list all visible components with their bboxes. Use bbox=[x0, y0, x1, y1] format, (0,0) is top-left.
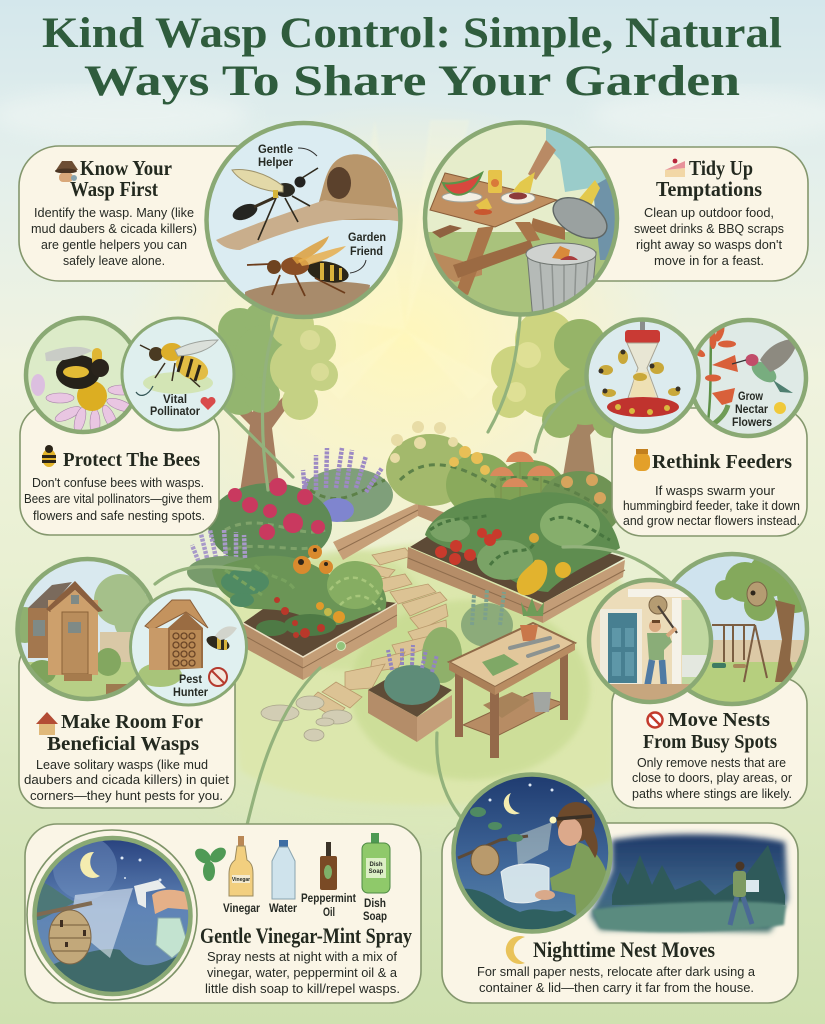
back flowering plants bbox=[298, 421, 622, 539]
body text: are gentle helpers you can bbox=[41, 237, 187, 252]
circle: headlamp person with nest bbox=[452, 773, 612, 935]
heading: Nighttime Nest Moves bbox=[533, 937, 715, 962]
title bbox=[42, 10, 782, 105]
circle: door and person removing nest bbox=[588, 579, 718, 705]
body text: container & lid—then carry it far from the house. bbox=[479, 980, 754, 995]
circle: garden shed bbox=[15, 556, 154, 702]
circle: bee hotel and pest hunter: Pest bbox=[179, 672, 202, 686]
circle: vital pollinator bee bbox=[120, 318, 235, 433]
panel: gentle vinegar-mint spray bbox=[25, 824, 421, 1003]
icon: detective hat bbox=[55, 161, 78, 182]
circle: gentle helper and garden friend wasps: Helper bbox=[258, 155, 293, 169]
cicada killer wasp bbox=[247, 236, 351, 296]
picnic table bbox=[430, 173, 565, 295]
left raised bed bbox=[212, 545, 397, 680]
bee bbox=[140, 340, 218, 387]
heading: Gentle Vinegar-Mint Spray bbox=[200, 923, 412, 948]
mud nest mound bbox=[318, 154, 400, 220]
trash can bbox=[526, 197, 608, 312]
ingredient: dish soap: Dish bbox=[364, 896, 386, 910]
heading: Temptations bbox=[656, 177, 762, 201]
icon: honey jar bbox=[634, 449, 650, 471]
body text: corners—they hunt pests for you. bbox=[30, 788, 223, 803]
person with gloves bbox=[512, 128, 615, 260]
body text: close to doors, play areas, or bbox=[632, 770, 793, 785]
panel: move nests from busy spots bbox=[612, 678, 807, 808]
garden illustration bbox=[187, 421, 625, 805]
body text bbox=[31, 205, 197, 268]
ingredient: dish soap: Soap bbox=[363, 909, 387, 923]
icon: no pests sign bbox=[209, 668, 227, 686]
title: Kind Wasp Control: Simple, Natural bbox=[42, 10, 782, 57]
ingredient: water bottle: Water bbox=[269, 901, 297, 915]
body text: Clean up outdoor food, bbox=[644, 205, 774, 220]
circle: nectar flowers and hummingbird: Nectar bbox=[735, 402, 768, 416]
heading: Make Room For bbox=[61, 711, 203, 733]
small raised bed with lavender bbox=[368, 645, 452, 742]
right garden tree bbox=[491, 310, 628, 482]
circle: night spray scene bbox=[27, 830, 200, 1000]
stepping stones bbox=[261, 696, 352, 741]
heading: Protect The Bees bbox=[63, 449, 200, 471]
ingredient: dish soap: Soap bbox=[369, 869, 384, 875]
heading: Rethink Feeders bbox=[652, 451, 792, 473]
body text: Bees are vital pollinators—give them bbox=[24, 491, 212, 506]
panel: know your wasp first bbox=[19, 146, 275, 281]
body text: mud daubers & cicada killers) bbox=[31, 221, 197, 236]
circle: nectar flowers and hummingbird: Grow bbox=[738, 389, 764, 403]
body text: daubers and cicada killers) in quiet bbox=[24, 772, 229, 787]
body text: Only remove nests that are bbox=[637, 755, 786, 770]
red flower cluster bbox=[187, 478, 332, 588]
ingredient: peppermint oil: Peppermint bbox=[301, 891, 356, 905]
panel: make room for beneficial wasps bbox=[19, 640, 235, 808]
ingredient: vinegar bottle bbox=[223, 836, 260, 915]
body text bbox=[623, 483, 800, 528]
body text: For small paper nests, relocate after dark using a bbox=[477, 964, 756, 979]
circle: gentle helper and garden friend wasps: Garden bbox=[348, 230, 386, 244]
body text: If wasps swarm your bbox=[655, 483, 776, 498]
stepping plank path bbox=[308, 548, 448, 718]
body text: Identify the wasp. Many (like bbox=[34, 205, 194, 220]
potting table bbox=[449, 598, 575, 758]
panel: protect the bees bbox=[20, 405, 219, 535]
body text bbox=[632, 755, 793, 801]
body text: and grow nectar flowers instead. bbox=[623, 513, 800, 528]
plates and watermelon bbox=[442, 173, 482, 202]
back wooden bed wall bbox=[333, 503, 465, 560]
heading: From Busy Spots bbox=[643, 731, 777, 753]
circle: gentle helper and garden friend wasps: Gentle bbox=[258, 142, 293, 156]
heading: Beneficial Wasps bbox=[47, 733, 199, 755]
panel: tidy up temptations bbox=[560, 147, 808, 281]
ingredient: water bottle bbox=[269, 840, 297, 915]
ingredient: vinegar bottle: Vinegar bbox=[232, 877, 250, 883]
body text bbox=[634, 205, 784, 268]
circle: nectar flowers and hummingbird: Flowers bbox=[732, 415, 772, 429]
body text bbox=[24, 757, 229, 803]
body text: right away so wasps don't bbox=[636, 237, 782, 252]
circle: vital pollinator bee: Vital bbox=[163, 392, 187, 406]
circle: backyard swing and nest bbox=[671, 552, 810, 706]
icon: cake slice bbox=[665, 159, 685, 177]
body text bbox=[205, 949, 400, 996]
body text: Spray nests at night with a mix of bbox=[207, 949, 397, 964]
icon: mint leaves bbox=[192, 845, 229, 881]
body text bbox=[24, 475, 212, 523]
icon: heart bbox=[200, 397, 216, 410]
ingredient: dish soap: Dish bbox=[369, 862, 383, 868]
body text: move in for a feast. bbox=[654, 253, 764, 268]
heading bbox=[70, 156, 172, 201]
night walking scene bbox=[590, 834, 788, 932]
body text: hummingbird feeder, take it down bbox=[623, 498, 800, 513]
circle: vital pollinator bee: Pollinator bbox=[150, 404, 200, 418]
circle: bee hotel and pest hunter bbox=[130, 588, 250, 708]
heading bbox=[656, 156, 762, 201]
heading bbox=[643, 709, 777, 753]
icon: bee bbox=[42, 445, 56, 467]
body text: Don't confuse bees with wasps. bbox=[32, 475, 204, 490]
body text: paths where stings are likely. bbox=[632, 786, 792, 801]
heading: Know Your bbox=[80, 156, 172, 180]
body text: flowers and safe nesting spots. bbox=[33, 508, 205, 523]
heading bbox=[47, 711, 203, 755]
body text bbox=[477, 964, 756, 995]
heading: Tidy Up bbox=[689, 156, 753, 180]
ingredient: peppermint oil: Oil bbox=[323, 905, 335, 919]
ingredient: peppermint oil bbox=[301, 842, 356, 919]
icon: small house bbox=[36, 712, 58, 735]
icon: crescent moon bbox=[506, 936, 525, 964]
title: Ways To Share Your Garden bbox=[84, 58, 740, 105]
panel: nighttime nest moves bbox=[442, 773, 798, 1003]
circle: picnic table and trash can bbox=[424, 118, 624, 320]
circle: nectar flowers and hummingbird bbox=[688, 318, 810, 440]
circle: gentle helper and garden friend wasps: Friend bbox=[350, 244, 383, 258]
body text: safely leave alone. bbox=[63, 253, 165, 268]
mud dauber wasp bbox=[230, 168, 318, 240]
body text: little dish soap to kill/repel wasps. bbox=[205, 981, 400, 996]
circle: bee hotel and pest hunter: Hunter bbox=[173, 685, 208, 699]
panel: rethink feeders bbox=[612, 408, 807, 536]
left garden tree bbox=[212, 302, 338, 492]
circle: gentle helper and garden friend wasps bbox=[200, 120, 410, 320]
body text: Leave solitary wasps (like mud bbox=[36, 757, 208, 772]
circle: bumblebee on flower bbox=[24, 316, 132, 434]
body text: vinegar, water, peppermint oil & a bbox=[207, 965, 398, 980]
icon: no sign bbox=[648, 712, 662, 728]
connector lines bbox=[155, 317, 672, 825]
heading: Move Nests bbox=[668, 709, 770, 731]
ingredient: dish soap bbox=[362, 833, 390, 923]
lawn bbox=[215, 542, 625, 805]
body text: sweet drinks & BBQ scraps bbox=[634, 221, 784, 236]
ingredient: vinegar bottle: Vinegar bbox=[223, 901, 260, 915]
heading: Wasp First bbox=[70, 177, 158, 201]
herbs by table bbox=[422, 590, 513, 683]
circle: hummingbird feeder bbox=[585, 318, 700, 433]
right raised bed with vegetables bbox=[407, 492, 625, 623]
